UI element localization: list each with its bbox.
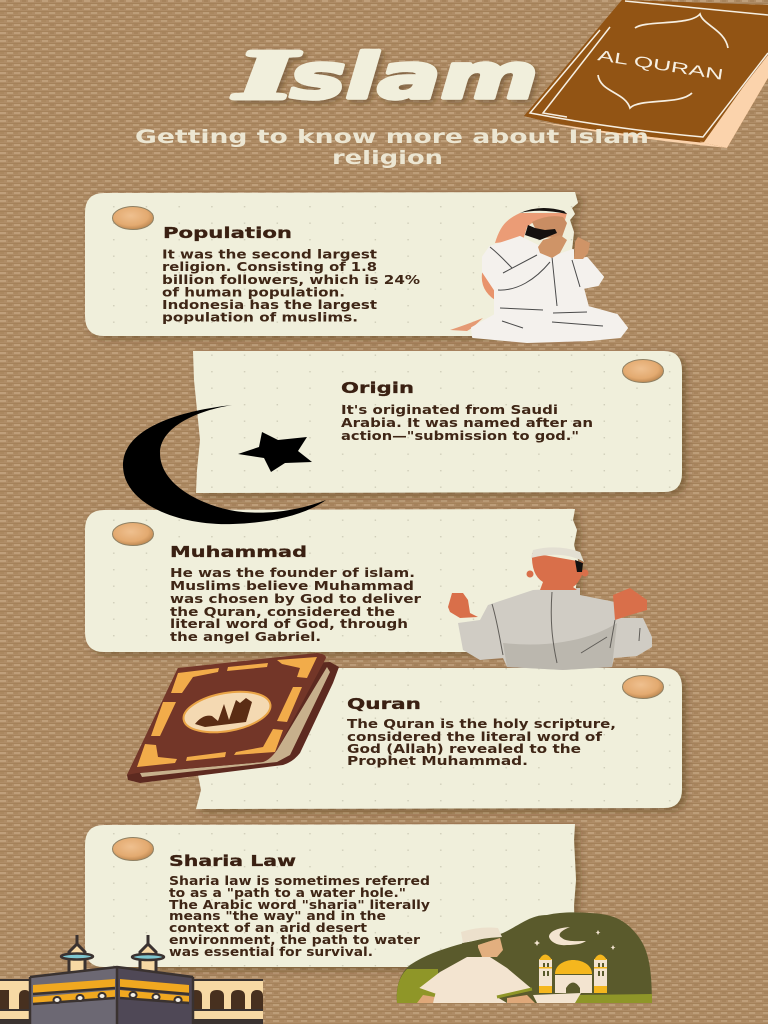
panel: muhammad: [85, 509, 578, 652]
text: sharia law: to as a "path to a water hole.": [169, 885, 406, 900]
mosque: [539, 954, 607, 993]
text: muhammad: was chosen by God to deliver: [170, 591, 422, 606]
text: sharia law: context of an arid desert: [169, 920, 367, 935]
title: I: [234, 37, 300, 114]
icon: crescent and star: [123, 405, 326, 524]
icon: ornate Quran book: [127, 653, 339, 783]
icon: man raising hands in prayer: [448, 547, 652, 670]
pin: [112, 206, 154, 230]
text: sharia law: Sharia law is sometimes referred: [169, 873, 430, 888]
text: sharia law: environment, the path to water: [169, 932, 421, 947]
panel: quran: [194, 668, 682, 809]
heading: sharia law: Sharia Law: [169, 852, 296, 870]
icon: Al Quran book: AL QURAN: [596, 47, 724, 84]
moon: [549, 927, 586, 945]
heading: population: Population: [163, 224, 292, 242]
minarets: [61, 935, 164, 974]
stars: [534, 930, 616, 950]
text: sharia law: The Arabic word "sharia" literally: [169, 897, 430, 912]
text: population: religion. Consisting of 1.8: [162, 259, 377, 274]
subtitle: Getting to know more about Islam: [135, 126, 649, 148]
text: quran: The Quran is the holy scripture,: [347, 716, 616, 731]
title: [234, 37, 538, 114]
icon: Al Quran book: [524, 0, 768, 148]
text: population: billion followers, which is 24%: [162, 272, 421, 287]
pin: [622, 360, 664, 382]
text: population: It was the second largest: [162, 246, 377, 262]
pin: [622, 676, 664, 698]
text: quran: God (Allah) revealed to the: [347, 741, 581, 756]
text: sharia law: [169, 873, 430, 959]
title: slam: [290, 40, 538, 113]
text: quran: Prophet Muhammad.: [347, 753, 528, 768]
subtitle: religion: [332, 147, 443, 169]
text: origin: Arabia. It was named after an: [341, 415, 593, 430]
subtitle: [135, 126, 649, 169]
icon: man and mosque at night: [397, 912, 652, 1003]
text: muhammad: the Quran, considered the: [170, 604, 395, 619]
text: origin: [341, 402, 593, 443]
text: muhammad: He was the founder of islam.: [170, 565, 415, 580]
heading: origin: Origin: [341, 379, 414, 397]
text: population: of human population.: [162, 284, 345, 300]
text: sharia law: was essential for survival.: [169, 944, 373, 959]
icon: man praying in white robe: [450, 208, 627, 342]
text: sharia law: means "the way" and in the: [169, 908, 386, 923]
text: origin: It's originated from Saudi: [341, 402, 558, 417]
pin: [112, 522, 154, 546]
text: quran: [347, 716, 616, 768]
heading: quran: Quran: [347, 695, 421, 713]
panel: population: [85, 192, 578, 336]
text: population: [162, 246, 421, 324]
person: [417, 928, 535, 1003]
pin: [112, 838, 154, 860]
panel: sharia law: [85, 824, 576, 967]
heading: muhammad: Muhammad: [170, 543, 307, 561]
text: population: population of muslims.: [162, 310, 358, 324]
text: muhammad: Muslims believe Muhammad: [170, 578, 414, 593]
icon: Kaaba and arcades: [0, 935, 263, 1024]
text: population: Indonesia has the largest: [162, 297, 377, 312]
text: muhammad: literal word of God, through: [170, 616, 408, 631]
text: muhammad: the angel Gabriel.: [170, 629, 321, 644]
text: origin: action—"submission to god.": [341, 428, 579, 443]
text: muhammad: [170, 565, 422, 644]
text: quran: considered the literal word of: [347, 729, 603, 744]
panel: origin: [193, 351, 682, 493]
